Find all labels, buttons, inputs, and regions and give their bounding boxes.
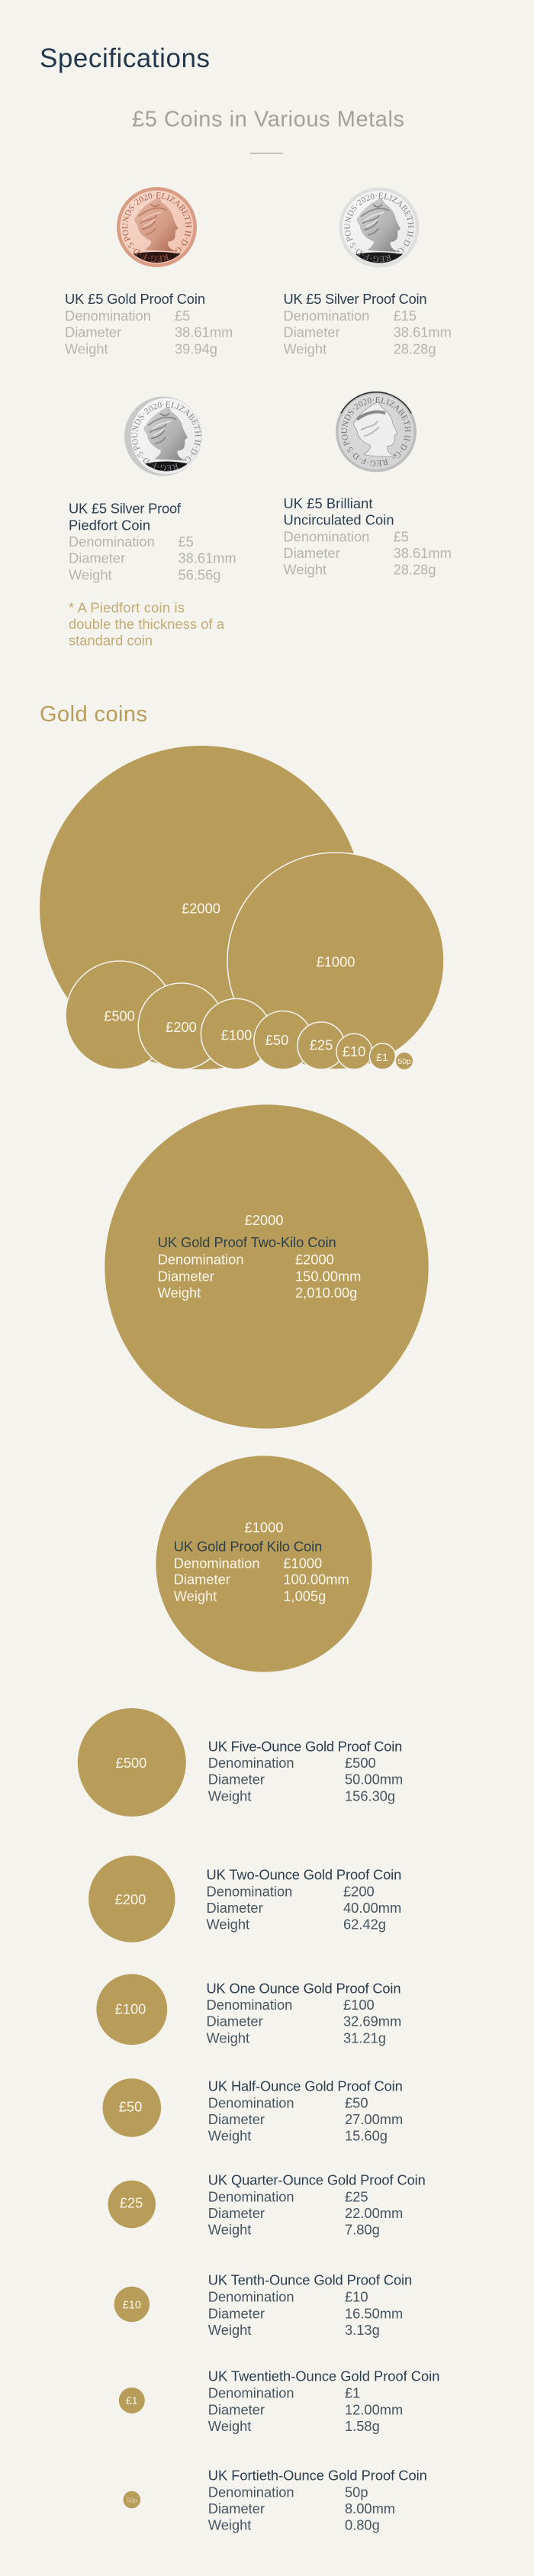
coin specifications <box>69 534 236 582</box>
coin: £25 <box>108 2181 156 2228</box>
coin name: Uncirculated Coin <box>284 512 394 528</box>
coin name: UK Gold Proof Two-Kilo Coin <box>158 1234 336 1250</box>
coin specifications: £15 <box>394 308 417 324</box>
coin specifications <box>208 2094 403 2143</box>
coin specifications: £2000 <box>295 1252 334 1268</box>
coin specifications: Weight <box>208 1788 251 1804</box>
coin specifications: 3.13g <box>345 2322 380 2338</box>
coin specifications: £500 <box>345 1755 376 1771</box>
coin: £100 <box>96 1974 167 2045</box>
coin specifications <box>174 1555 349 1604</box>
panel: £2000 two-kilo coin <box>105 1104 429 1429</box>
coin specifications: Diameter <box>208 2500 265 2516</box>
coin specifications: 50p <box>345 2484 368 2500</box>
coin specifications: Weight <box>158 1285 201 1301</box>
coin specifications: Denomination <box>208 2484 294 2500</box>
coin value: £25 <box>120 2194 143 2210</box>
coin specifications: Weight <box>284 562 327 578</box>
panel: £50 half-ounce coin <box>102 2078 403 2143</box>
coin specifications: £5 <box>394 528 409 544</box>
coin specifications <box>208 2289 403 2338</box>
coin: £50 <box>102 2078 161 2137</box>
coin specifications: £25 <box>345 2188 368 2204</box>
coin specifications: Denomination <box>206 1997 292 2013</box>
coin specifications: 38.61mm <box>394 545 452 561</box>
coin specifications <box>208 2385 403 2434</box>
coin specifications: 15.60g <box>345 2128 388 2143</box>
coin specifications: Diameter <box>208 2401 265 2417</box>
coin specifications: 100.00mm <box>283 1572 349 1588</box>
coin: £200 <box>88 1855 175 1942</box>
coin specifications: Weight <box>65 340 108 356</box>
coin specifications <box>208 1755 403 1804</box>
coin specifications: Weight <box>206 1916 249 1933</box>
coin name: UK Five-Ounce Gold Proof Coin <box>208 1738 402 1754</box>
coin value: 50p <box>127 2497 137 2503</box>
coin specifications <box>158 1252 361 1301</box>
note about piedfort thickness: standard coin <box>69 633 153 649</box>
coin name: UK One Ounce Gold Proof Coin <box>206 1980 401 1996</box>
coin name: UK Two-Ounce Gold Proof Coin <box>206 1867 401 1883</box>
coin specifications: Diameter <box>284 545 340 561</box>
coin specifications: Denomination <box>174 1555 260 1571</box>
panel: £500 five-ounce coin <box>78 1708 403 1817</box>
chart: overlapping gold coins by relative size: £25 <box>310 1037 333 1053</box>
coin value: £10 <box>123 2300 141 2312</box>
coin specifications: Denomination <box>208 2385 294 2401</box>
coin specifications: 28.28g <box>394 340 436 356</box>
coin specifications: Denomination <box>208 2289 294 2305</box>
coin specifications: Diameter <box>206 1900 263 1916</box>
coin name: UK £5 Brilliant <box>284 495 372 511</box>
chart: overlapping gold coins by relative size: £100 <box>221 1027 252 1043</box>
coin specifications: Diameter <box>65 324 121 340</box>
coin name: UK Twentieth-Ounce Gold Proof Coin <box>208 2368 439 2384</box>
icon: piedfort coin: REG·F·D·5 POUNDS·2020·ELIZABETH II·D·G· <box>131 401 201 471</box>
coin specifications: 62.42g <box>343 1916 386 1933</box>
chart: overlapping gold coins by relative size: £2000 <box>182 901 220 917</box>
coin specifications: 156.30g <box>345 1788 395 1804</box>
title: Specifications <box>40 44 210 73</box>
coin name: UK Half-Ounce Gold Proof Coin <box>208 2078 403 2094</box>
coin specifications: 38.61mm <box>179 550 236 566</box>
coin specifications: Diameter <box>158 1268 214 1284</box>
coin specifications: Weight <box>206 2030 249 2046</box>
coin: 50p <box>124 2491 140 2508</box>
section heading: £5 coins: £5 Coins in Various Metals <box>132 108 404 132</box>
panel: UK £5 brilliant uncirculated coin <box>284 391 452 578</box>
chart: overlapping gold coins by relative size: £50 <box>265 1032 288 1048</box>
icon: brilliant uncirculated coin: REG·F·D·5 POUNDS·2020·ELIZABETH II·D·G· <box>342 397 411 466</box>
coin specifications: 50.00mm <box>345 1772 403 1788</box>
chart: overlapping gold coins by relative size: £500 <box>104 1008 135 1024</box>
coin: £500 <box>78 1708 186 1817</box>
coin specifications: Denomination <box>208 1755 294 1771</box>
coin specifications: Diameter <box>284 324 340 340</box>
coin specifications <box>208 2188 403 2237</box>
coin name: UK £5 Gold Proof Coin <box>65 291 205 307</box>
coin specifications: 28.28g <box>394 562 436 578</box>
coin value: £1000 <box>245 1520 283 1536</box>
coin value: £200 <box>115 1891 146 1907</box>
coin name: UK Tenth-Ounce Gold Proof Coin <box>208 2272 412 2288</box>
coin specifications: Diameter <box>208 2111 265 2127</box>
coin specifications: 40.00mm <box>343 1900 401 1916</box>
chart: overlapping gold coins by relative size: £200 <box>166 1019 197 1035</box>
coin value: £100 <box>115 2001 146 2017</box>
coin specifications: Denomination <box>69 534 155 550</box>
coin specifications: Diameter <box>69 550 125 566</box>
coin specifications: Weight <box>208 2221 251 2237</box>
coin specifications: 1,005g <box>283 1588 326 1604</box>
coin specifications: 2,010.00g <box>295 1285 357 1301</box>
coin: £10 <box>114 2287 150 2322</box>
coin name: UK Gold Proof Kilo Coin <box>174 1538 322 1554</box>
coin name: Piedfort Coin <box>69 517 150 533</box>
coin specifications: Diameter <box>206 2013 263 2030</box>
coin specifications: Weight <box>208 2418 251 2434</box>
coin specifications: Weight <box>174 1588 217 1604</box>
panel: £1000 kilo coin <box>156 1456 372 1672</box>
coin value: £1 <box>126 2394 138 2407</box>
coin specifications <box>284 308 452 356</box>
coin specifications: £1000 <box>283 1555 322 1571</box>
note about piedfort thickness: * A Piedfort coin is <box>69 599 185 615</box>
coin specifications: Weight <box>69 566 112 582</box>
coin: £1000 <box>156 1456 372 1672</box>
coin specifications: Weight <box>208 2517 251 2532</box>
coin specifications <box>208 2484 395 2532</box>
coin: £1 <box>119 2387 145 2413</box>
coin specifications: £10 <box>345 2289 368 2305</box>
coin name <box>69 501 182 533</box>
coin name: UK Fortieth-Ounce Gold Proof Coin <box>208 2468 427 2484</box>
coin specifications: 32.69mm <box>343 2013 401 2030</box>
panel: £1 twentieth-ounce coin <box>119 2368 439 2434</box>
coin specifications: 38.61mm <box>175 324 233 340</box>
coin value: £50 <box>119 2099 142 2115</box>
coin value: £500 <box>116 1755 146 1771</box>
coin specifications <box>284 528 452 578</box>
panel: £100 one-ounce coin <box>96 1974 401 2046</box>
coin specifications: Denomination <box>284 528 369 544</box>
coin specifications: Denomination <box>284 308 369 324</box>
coin specifications: 8.00mm <box>345 2500 395 2516</box>
coin specifications: 39.94g <box>175 340 217 356</box>
coin specifications: Weight <box>208 2128 251 2143</box>
coin name: UK £5 Silver Proof <box>69 501 182 517</box>
coin specifications: 27.00mm <box>345 2111 403 2127</box>
coin specifications <box>206 1997 401 2046</box>
coin specifications: £5 <box>175 308 190 324</box>
icon: silver proof coin: REG·F·D·5 POUNDS·2020·ELIZABETH II·D·G· <box>345 192 414 263</box>
coin specifications: £5 <box>179 534 194 550</box>
panel: UK £5 silver proof piedfort coin <box>69 397 236 649</box>
coin specifications: Diameter <box>208 2205 265 2221</box>
coin name: UK £5 Silver Proof Coin <box>284 291 427 307</box>
coin specifications: £200 <box>343 1883 375 1899</box>
icon: gold proof coin: REG·F·D·5 POUNDS·2020·ELIZABETH II·D·G· <box>122 192 192 262</box>
coin specifications: Diameter <box>174 1572 230 1588</box>
note about piedfort thickness <box>69 599 225 649</box>
coin specifications: 12.00mm <box>345 2401 403 2417</box>
panel: £25 quarter-ounce coin <box>108 2171 426 2237</box>
panel: £200 two-ounce coin <box>88 1855 401 1942</box>
coin name <box>284 495 394 528</box>
chart: overlapping gold coins by relative size: £1000 <box>317 954 355 970</box>
coin specifications: Weight <box>208 2322 251 2338</box>
panel: UK £5 silver proof coin <box>284 188 452 357</box>
coin specifications: 7.80g <box>345 2221 380 2237</box>
coin specifications: 0.80g <box>345 2517 380 2532</box>
coin value: £2000 <box>245 1212 283 1228</box>
coin specifications: Diameter <box>208 2305 265 2321</box>
chart: overlapping gold coins by relative size: £10 <box>343 1043 365 1059</box>
coin specifications: Denomination <box>208 2188 294 2204</box>
panel: 50p fortieth-ounce coin <box>124 2468 427 2532</box>
coin specifications: 31.21g <box>343 2030 386 2046</box>
coin specifications: Denomination <box>206 1883 292 1899</box>
coin specifications: £50 <box>345 2094 368 2110</box>
coin specifications: 16.50mm <box>345 2305 403 2321</box>
coin specifications: Weight <box>284 340 327 356</box>
panel: £10 tenth-ounce coin <box>114 2272 412 2338</box>
coin specifications: Denomination <box>158 1252 244 1268</box>
coin specifications: 38.61mm <box>394 324 452 340</box>
coin specifications <box>65 308 233 356</box>
coin specifications <box>206 1883 401 1933</box>
coin specifications: £100 <box>343 1997 375 2013</box>
coin name: UK Quarter-Ounce Gold Proof Coin <box>208 2171 426 2188</box>
coin specifications: Diameter <box>208 1772 265 1788</box>
chart: overlapping gold coins by relative size: £1 <box>376 1051 388 1063</box>
panel: UK £5 gold proof coin <box>65 187 233 357</box>
coin specifications: 22.00mm <box>345 2205 403 2221</box>
coin specifications: Denomination <box>208 2094 294 2110</box>
coin specifications: 56.56g <box>179 566 220 582</box>
coin specifications: Denomination <box>65 308 151 324</box>
chart: overlapping gold coins by relative size <box>40 746 444 1069</box>
coin: £2000 <box>105 1104 429 1429</box>
note about piedfort thickness: double the thickness of a <box>69 616 225 632</box>
coin specifications: 150.00mm <box>295 1268 361 1284</box>
coin specifications: 1.58g <box>345 2418 380 2434</box>
chart: overlapping gold coins by relative size: 50p <box>397 1057 411 1066</box>
section heading: gold coins: Gold coins <box>40 702 147 727</box>
coin specifications: £1 <box>345 2385 360 2401</box>
